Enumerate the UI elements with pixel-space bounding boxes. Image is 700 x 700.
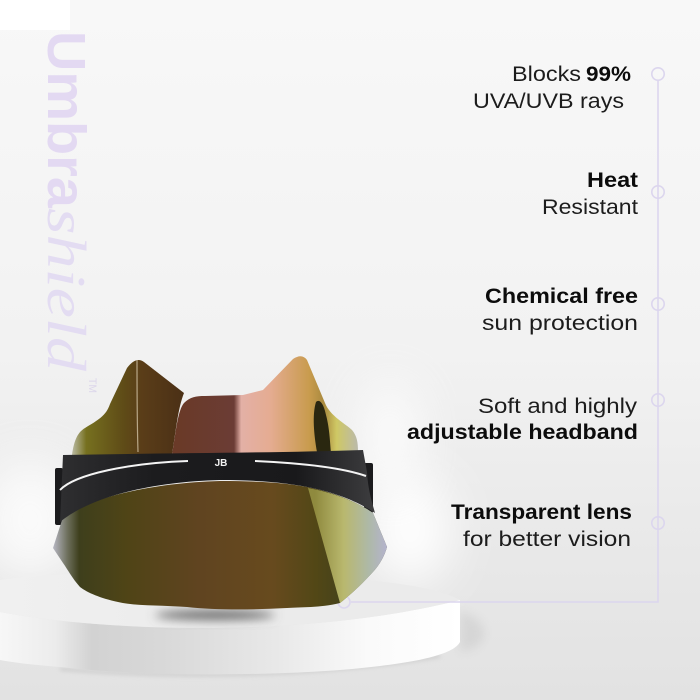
feature: blocks 99% UVA/UVB rays — [473, 63, 631, 113]
feature: chemical free sun protection — [482, 285, 638, 335]
visor left ear — [72, 360, 184, 455]
side straps — [55, 463, 373, 525]
feature: blocks 99% UVA/UVB rays: 99% — [586, 63, 631, 86]
feature: soft adjustable headband — [407, 395, 638, 444]
headband white piping — [60, 461, 366, 490]
visor product — [53, 356, 387, 609]
headband — [60, 450, 375, 522]
vertical brand name Umbrashield: Umbra — [36, 31, 96, 209]
timeline connector with nodes — [351, 68, 664, 602]
white pedestal — [0, 573, 460, 675]
feature: transparent lens: for better vision — [463, 528, 631, 551]
feature: blocks 99% UVA/UVB rays: UVA/UVB rays — [473, 90, 624, 113]
feature: soft adjustable headband: Soft and highly — [478, 395, 638, 418]
vertical brand name Umbrashield — [36, 31, 98, 393]
feature: heat resistant: Heat — [587, 169, 638, 192]
feature: heat resistant: Resistant — [542, 196, 638, 219]
feature: transparent lens: Transparent lens — [451, 501, 632, 524]
front lens — [53, 481, 387, 609]
feature: chemical free sun protection: Chemical free — [485, 285, 638, 308]
feature: heat resistant — [542, 169, 638, 219]
visor ear highlights — [137, 360, 331, 452]
feature: chemical free sun protection: sun protection — [482, 312, 638, 335]
feature: soft adjustable headband: adjustable headband — [407, 421, 638, 444]
vertical brand name Umbrashield: shield — [36, 208, 97, 372]
lens right facet — [308, 488, 387, 603]
feature: blocks 99% UVA/UVB rays: Blocks — [512, 63, 581, 86]
visor right ear and crown — [172, 356, 358, 455]
vertical brand name Umbrashield: TM — [86, 378, 98, 393]
feature: transparent lens — [451, 501, 632, 551]
headband logo: JB — [215, 458, 227, 469]
